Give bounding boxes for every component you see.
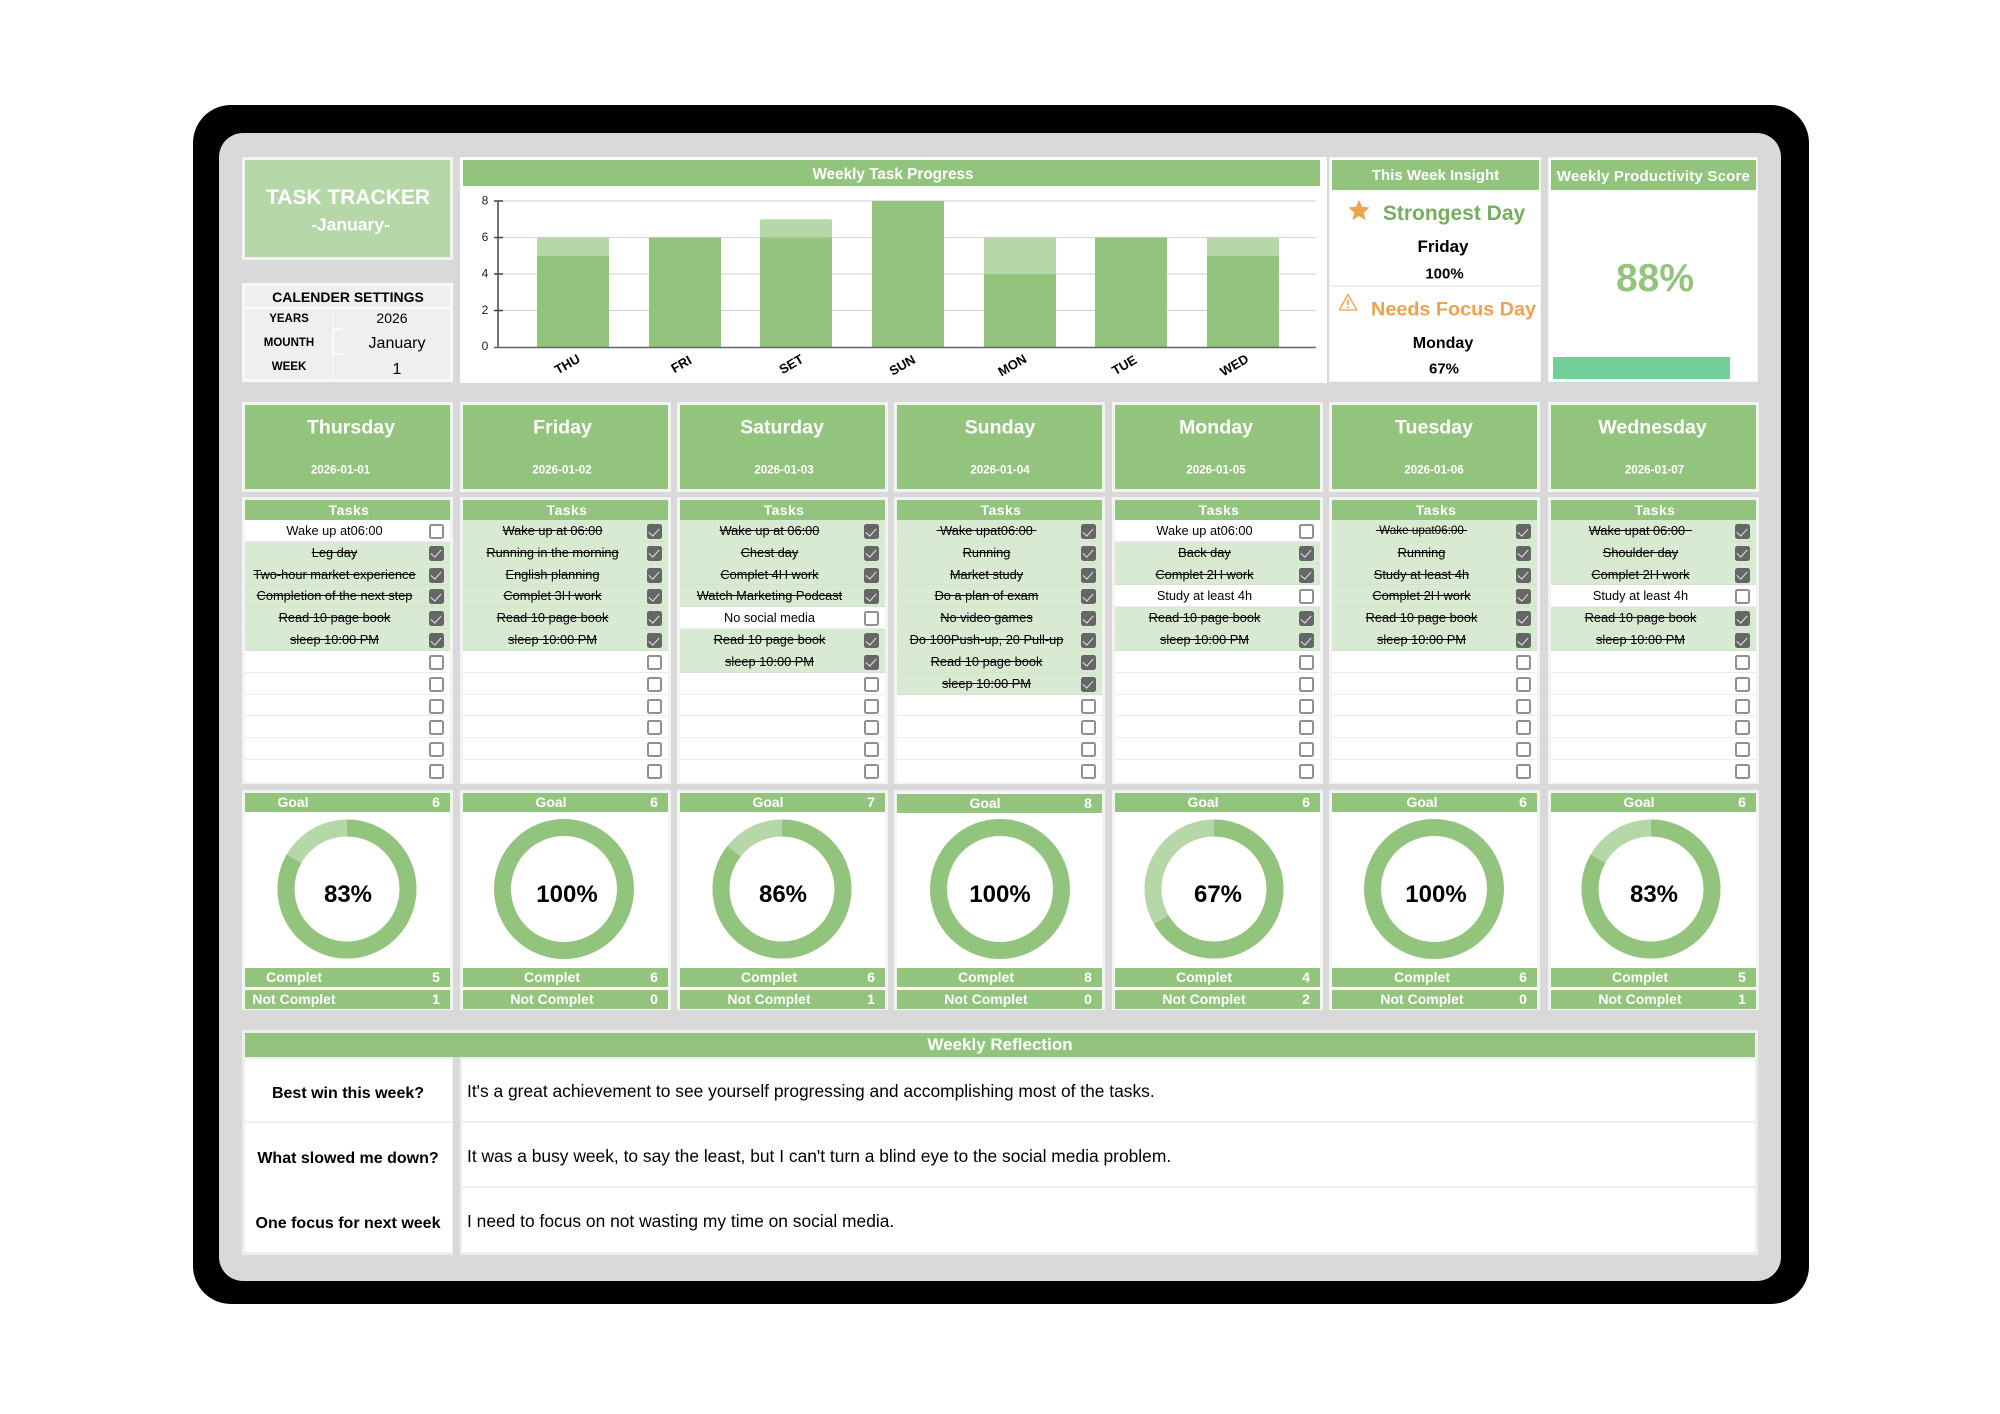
complete bar: Complet: [958, 969, 1014, 985]
donut percent: 67%: [1194, 881, 1242, 908]
not complete bar: [1551, 990, 1756, 1009]
day header: Thursday: [307, 416, 395, 438]
day header: Saturday: [740, 416, 824, 438]
complete bar: Complet: [524, 969, 580, 985]
complete bar: 5: [432, 969, 440, 985]
task list: sleep 10:00 PM: [1160, 632, 1249, 647]
complete bar: 6: [650, 969, 658, 985]
panel: weekly productivity score: [1548, 157, 1758, 382]
not complete bar: [1115, 990, 1320, 1009]
task list: Read 10 page book: [1585, 610, 1696, 625]
goal bar: Goal: [1406, 794, 1438, 810]
donut percent: 100%: [1405, 881, 1467, 908]
task list: Complet 2H work: [1591, 567, 1690, 582]
donut percent: 100%: [536, 881, 598, 908]
column: Monday: [1112, 402, 1323, 1010]
task list: Back day: [1178, 545, 1231, 560]
device frame: [193, 105, 1809, 1304]
day header: 2026-01-07: [1625, 463, 1684, 476]
goal bar: [1115, 793, 1320, 812]
not complete bar: 0: [650, 991, 658, 1007]
column: Saturday: [677, 402, 888, 1010]
complete bar: [897, 968, 1102, 987]
title panel: [242, 157, 453, 260]
not complete bar: [245, 990, 450, 1009]
goal bar: 8: [1084, 795, 1092, 811]
goal bar: [1332, 793, 1537, 812]
task list: Leg day: [312, 545, 357, 560]
task list: Wake up at06:00: [286, 523, 383, 538]
answer 3: [462, 1188, 1755, 1252]
panel: weekly reflection: [242, 1030, 1758, 1255]
task list: Tasks: [764, 502, 804, 518]
stacked bar chart: 6: [482, 230, 489, 244]
stacked bar chart: 8: [482, 194, 489, 208]
goal bar: Goal: [1623, 794, 1655, 810]
month value: January: [369, 335, 425, 352]
chart heading: Weekly Task Progress: [812, 166, 974, 183]
complete bar: Complet: [741, 969, 797, 985]
column gap: [453, 1057, 460, 1255]
day header: [677, 402, 888, 492]
task list: Wake up at06:00: [1156, 523, 1253, 538]
stacked bar chart: 4: [482, 266, 489, 280]
stacked bar chart: TUE: [1109, 352, 1140, 378]
goal bar: [245, 793, 450, 812]
daily stats: [1329, 790, 1540, 1010]
calendar heading: CALENDER SETTINGS: [272, 289, 424, 305]
column: Tuesday: [1329, 402, 1540, 1010]
goal bar: [463, 793, 668, 812]
subtitle month: -January-: [311, 214, 390, 234]
donut chart: [494, 819, 634, 959]
task list: Wake upat 06:00: [1589, 523, 1685, 538]
column: Thursday: [242, 402, 453, 1010]
not complete bar: 0: [1519, 991, 1527, 1007]
answer 2: [462, 1123, 1755, 1186]
task list: No social media: [724, 610, 815, 625]
task list: Tasks: [329, 502, 369, 518]
goal bar: Goal: [969, 795, 1001, 811]
donut chart: [1364, 819, 1504, 959]
goal bar: 6: [1519, 794, 1527, 810]
years label: YEARS: [269, 313, 309, 325]
task list: Watch Marketing Podcast: [697, 588, 842, 603]
title: TASK TRACKER: [266, 186, 430, 209]
stacked bar chart: SUN: [887, 352, 918, 378]
stacked bar chart: FRI: [668, 352, 694, 376]
task list: Complet 2H work: [1372, 588, 1471, 603]
task list: Read 10 page book: [497, 610, 608, 625]
daily stats: [242, 790, 453, 1010]
question 3: One focus for next week: [256, 1215, 440, 1232]
column: Wednesday: [1548, 402, 1759, 1010]
not complete bar: Not Complet: [1162, 991, 1246, 1007]
insight divider: [1330, 284, 1540, 286]
complete bar: [463, 968, 668, 987]
not complete bar: Not Complet: [727, 991, 811, 1007]
donut percent: 100%: [969, 881, 1031, 908]
task list: Read 10 page book: [1366, 610, 1477, 625]
day header: 2026-01-06: [1404, 463, 1464, 476]
daily stats: [894, 790, 1105, 1010]
donut percent: 86%: [759, 881, 807, 908]
complete bar: [1115, 968, 1320, 987]
task list: Tasks: [1416, 502, 1456, 518]
goal bar: Goal: [535, 794, 567, 810]
task list: sleep 10:00 PM: [1377, 632, 1466, 647]
task list: sleep 10:00 PM: [290, 632, 379, 647]
complete bar: Complet: [1612, 969, 1668, 985]
task list: Study at least 4h: [1157, 588, 1252, 603]
stacked bar chart: WED: [1217, 351, 1251, 379]
calendar column divider: [332, 309, 333, 379]
task list: Read 10 page book: [279, 610, 390, 625]
not complete bar: 1: [432, 991, 440, 1007]
donut chart: [1582, 820, 1720, 958]
task list: Wake up at 06:00: [503, 523, 602, 538]
task list: [894, 497, 1105, 784]
stacked bar chart: THU: [552, 351, 583, 377]
daily stats: [1112, 790, 1323, 1010]
task list: Wake upat06:00: [1379, 524, 1464, 537]
calendar rows divider: [245, 307, 450, 309]
task list: English planning: [506, 567, 599, 582]
answer 3: I need to focus on not wasting my time on social media.: [467, 1211, 894, 1231]
needs focus day label: Needs Focus Day: [1371, 298, 1536, 320]
day header: [242, 402, 453, 492]
complete bar: [1332, 968, 1537, 987]
task list: Tasks: [981, 502, 1021, 518]
not complete bar: [897, 990, 1102, 1009]
answer 1: [462, 1059, 1755, 1121]
complete bar: 8: [1084, 969, 1092, 985]
panel: calendar settings: [242, 283, 453, 382]
years value: 2026: [376, 310, 408, 326]
not complete bar: 1: [1738, 991, 1746, 1007]
task list: sleep 10:00 PM: [942, 676, 1031, 691]
complete bar: 5: [1738, 969, 1746, 985]
not complete bar: Not Complet: [944, 991, 1028, 1007]
task list: sleep 10:00 PM: [1596, 632, 1685, 647]
task list: Market study: [950, 567, 1023, 582]
strongest day label: Strongest Day: [1383, 202, 1525, 225]
stacked bar chart: 2: [482, 303, 489, 317]
goal bar: 6: [1738, 794, 1746, 810]
not complete bar: 2: [1302, 991, 1310, 1007]
answer 1: It's a great achievement to see yourself progressing and accomplishing most of the tasks.: [467, 1081, 1155, 1101]
task list: Two-hour market experience: [253, 567, 416, 582]
stacked bar chart: [482, 194, 1316, 379]
not complete bar: Not Complet: [1380, 991, 1464, 1007]
task list: sleep 10:00 PM: [508, 632, 597, 647]
goal bar: 6: [650, 794, 658, 810]
day header: 2026-01-02: [532, 463, 592, 476]
day header: [894, 402, 1105, 492]
month label: MOUNTH: [264, 337, 314, 349]
not complete bar: 1: [867, 991, 875, 1007]
task list: Tasks: [547, 502, 587, 518]
chart heading: [463, 160, 1320, 186]
task list: Chest day: [741, 545, 798, 560]
task list: Do a plan of exam: [935, 588, 1038, 603]
question 1: Best win this week?: [272, 1085, 424, 1102]
task list: Study at least 4h: [1593, 588, 1688, 603]
task list: No video games: [940, 610, 1033, 625]
reflection heading: Weekly Reflection: [927, 1035, 1073, 1054]
icon: star: [1348, 200, 1370, 220]
task list: Tasks: [1199, 502, 1239, 518]
donut percent: 83%: [1630, 881, 1678, 908]
task list: Running in the morning: [486, 545, 619, 560]
complete bar: 6: [1519, 969, 1527, 985]
stacked bar chart: SET: [777, 351, 806, 377]
task list: Running: [963, 545, 1010, 560]
complete bar: [680, 968, 885, 987]
complete bar: 6: [867, 969, 875, 985]
week value: 1: [393, 361, 401, 378]
day header: 2026-01-01: [311, 463, 370, 476]
task list: [242, 497, 453, 784]
score value: 88%: [1616, 257, 1694, 300]
task list: [1548, 497, 1759, 784]
task list: Wake up at 06:00: [720, 523, 819, 538]
day header: Monday: [1179, 416, 1253, 438]
day header: Wednesday: [1598, 416, 1707, 438]
task list: Running: [1398, 545, 1445, 560]
not complete bar: Not Complet: [510, 991, 594, 1007]
goal bar: 6: [1302, 794, 1310, 810]
icon: warning triangle: [1338, 294, 1358, 311]
task list: Read 10 page book: [1149, 610, 1260, 625]
daily stats: [677, 790, 888, 1010]
day header: [1112, 402, 1323, 492]
question 2: What slowed me down?: [257, 1150, 439, 1167]
day header: [1548, 402, 1759, 492]
answer 2: It was a busy week, to say the least, but I can't turn a blind eye to the social media problem.: [467, 1146, 1171, 1166]
task list: Completion of the next step: [257, 588, 412, 603]
goal bar: [680, 793, 885, 812]
reflection heading: [245, 1033, 1755, 1057]
donut chart: [930, 819, 1070, 959]
donut chart: [1144, 820, 1284, 958]
complete bar: [1551, 968, 1756, 987]
donut percent: 83%: [324, 881, 372, 908]
score progress bar: [1553, 357, 1730, 379]
insight heading: [1332, 160, 1539, 190]
insight heading: This Week Insight: [1372, 167, 1499, 184]
stacked bar chart: MON: [995, 351, 1029, 379]
complete bar: Complet: [1176, 969, 1232, 985]
week label: WEEK: [272, 361, 306, 373]
goal bar: Goal: [1187, 794, 1219, 810]
not complete bar: Not Complet: [1598, 991, 1682, 1007]
task list: Do 100Push-up, 20 Pull-up: [910, 632, 1063, 647]
day header: [1329, 402, 1540, 492]
donut chart: [712, 820, 852, 958]
score heading: [1551, 160, 1756, 190]
score heading: Weekly Productivity Score: [1557, 168, 1750, 185]
needs focus day percent: 67%: [1429, 360, 1459, 378]
complete bar: Complet: [266, 969, 322, 985]
goal bar: Goal: [752, 794, 784, 810]
task list: Read 10 page book: [931, 654, 1042, 669]
goal bar: Goal: [277, 794, 309, 810]
not complete bar: Not Complet: [252, 991, 336, 1007]
panel: weekly task progress: [460, 157, 1327, 383]
task list: sleep 10:00 PM: [725, 654, 814, 669]
question divider: [245, 1121, 452, 1123]
daily stats: [460, 790, 671, 1010]
daily stats: [1548, 790, 1759, 1010]
day header: Tuesday: [1395, 416, 1473, 438]
complete bar: [245, 968, 450, 987]
goal bar: 6: [432, 794, 440, 810]
strongest day name: Friday: [1417, 237, 1469, 256]
complete bar: 4: [1302, 969, 1310, 985]
task list: Read 10 page book: [714, 632, 825, 647]
column: Friday: [460, 402, 671, 1010]
task list: [460, 497, 671, 784]
task list: Tasks: [1635, 502, 1675, 518]
question column: [245, 1059, 452, 1252]
day header: 2026-01-05: [1186, 463, 1246, 476]
task list: [1329, 497, 1540, 784]
donut chart: [278, 820, 416, 958]
panel: this week insight: [1329, 157, 1541, 382]
day header: 2026-01-04: [970, 463, 1030, 476]
day header: [460, 402, 671, 492]
dashboard background: [219, 133, 1781, 1281]
day header: Friday: [533, 416, 592, 438]
task list: Complet 4H work: [720, 567, 819, 582]
not complete bar: 0: [1084, 991, 1092, 1007]
task list: Study at least 4h: [1374, 567, 1469, 582]
not complete bar: [463, 990, 668, 1009]
not complete bar: [680, 990, 885, 1009]
day header: 2026-01-03: [754, 463, 814, 476]
task list: [677, 497, 888, 784]
column: Sunday: [894, 402, 1105, 1010]
task list: Shoulder day: [1603, 545, 1678, 560]
task list: Complet 2H work: [1155, 567, 1254, 582]
goal bar: 7: [867, 794, 875, 810]
goal bar: [897, 794, 1102, 813]
task list: [1112, 497, 1323, 784]
not complete bar: [1332, 990, 1537, 1009]
stacked bar chart: 0: [482, 339, 489, 353]
strongest day percent: 100%: [1425, 266, 1464, 282]
complete bar: Complet: [1394, 969, 1450, 985]
needs focus day name: Monday: [1413, 335, 1473, 352]
month selector bracket: [332, 328, 342, 355]
goal bar: [1551, 793, 1756, 812]
day header: Sunday: [965, 416, 1035, 438]
task list: Complet 3H work: [503, 588, 602, 603]
task list: Wake upat06:00: [940, 523, 1033, 538]
